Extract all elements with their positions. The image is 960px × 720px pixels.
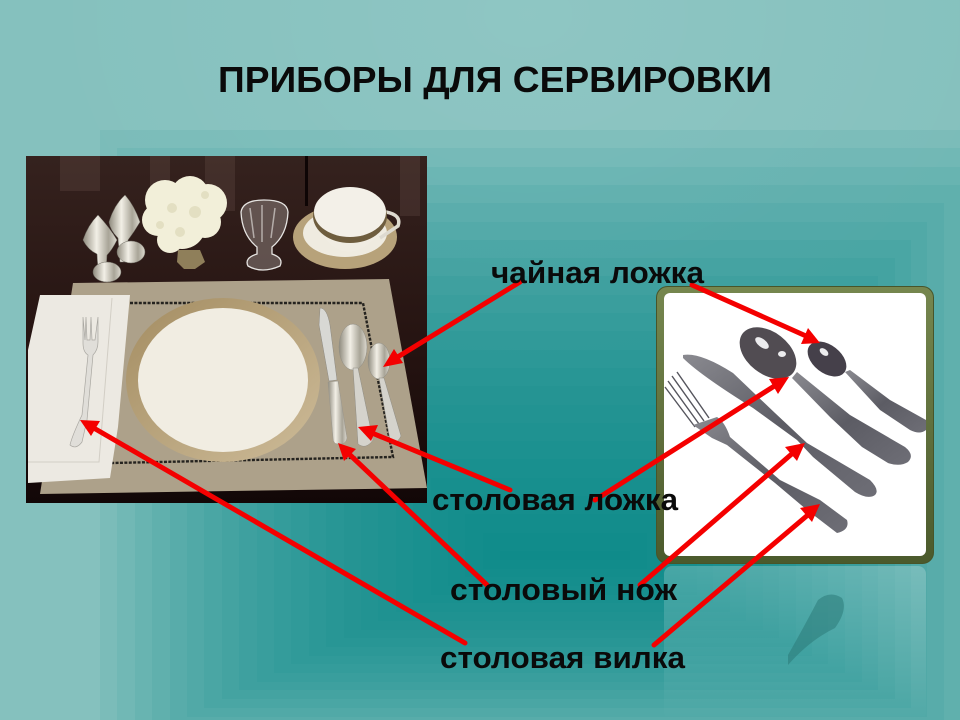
flowers in vase <box>142 176 227 269</box>
water glass <box>241 200 288 270</box>
teaspoon <box>801 334 926 432</box>
arrow: fork to photo <box>80 420 465 643</box>
panel: table setting photo <box>26 156 427 503</box>
cup and saucer <box>293 187 399 269</box>
fork <box>665 372 848 533</box>
arrow: fork to cutlery <box>654 504 820 645</box>
napkin with fork <box>28 295 130 483</box>
panel: cutlery image frame <box>656 286 934 564</box>
label: knife: столовый нож <box>450 573 677 607</box>
title: ПРИБОРЫ ДЛЯ СЕРВИРОВКИ <box>218 59 772 100</box>
salt and pepper shakers <box>83 195 145 282</box>
label: fork: столовая вилка <box>440 641 686 675</box>
reflection of cutlery frame <box>664 566 926 720</box>
label: tablespoon: столовая ложка <box>432 483 679 517</box>
label: teaspoon: чайная ложка <box>491 256 705 290</box>
table reflections <box>60 156 420 216</box>
arrows <box>80 282 820 645</box>
placemat <box>40 279 427 494</box>
hemstitch border <box>112 303 393 463</box>
arrow: tablespoon to photo <box>358 425 510 490</box>
arrow: teaspoon to photo <box>383 282 520 367</box>
table spoon <box>339 324 373 446</box>
knife <box>319 308 347 444</box>
arrow: teaspoon to cutlery <box>692 285 820 344</box>
tablespoon <box>730 317 911 465</box>
arrow: knife to photo <box>338 443 487 585</box>
arrow: tablespoon to cutlery <box>595 377 789 500</box>
teaspoon <box>368 343 401 442</box>
knife <box>683 355 877 497</box>
plate <box>126 298 320 462</box>
arrow: knife to cutlery <box>640 443 805 585</box>
